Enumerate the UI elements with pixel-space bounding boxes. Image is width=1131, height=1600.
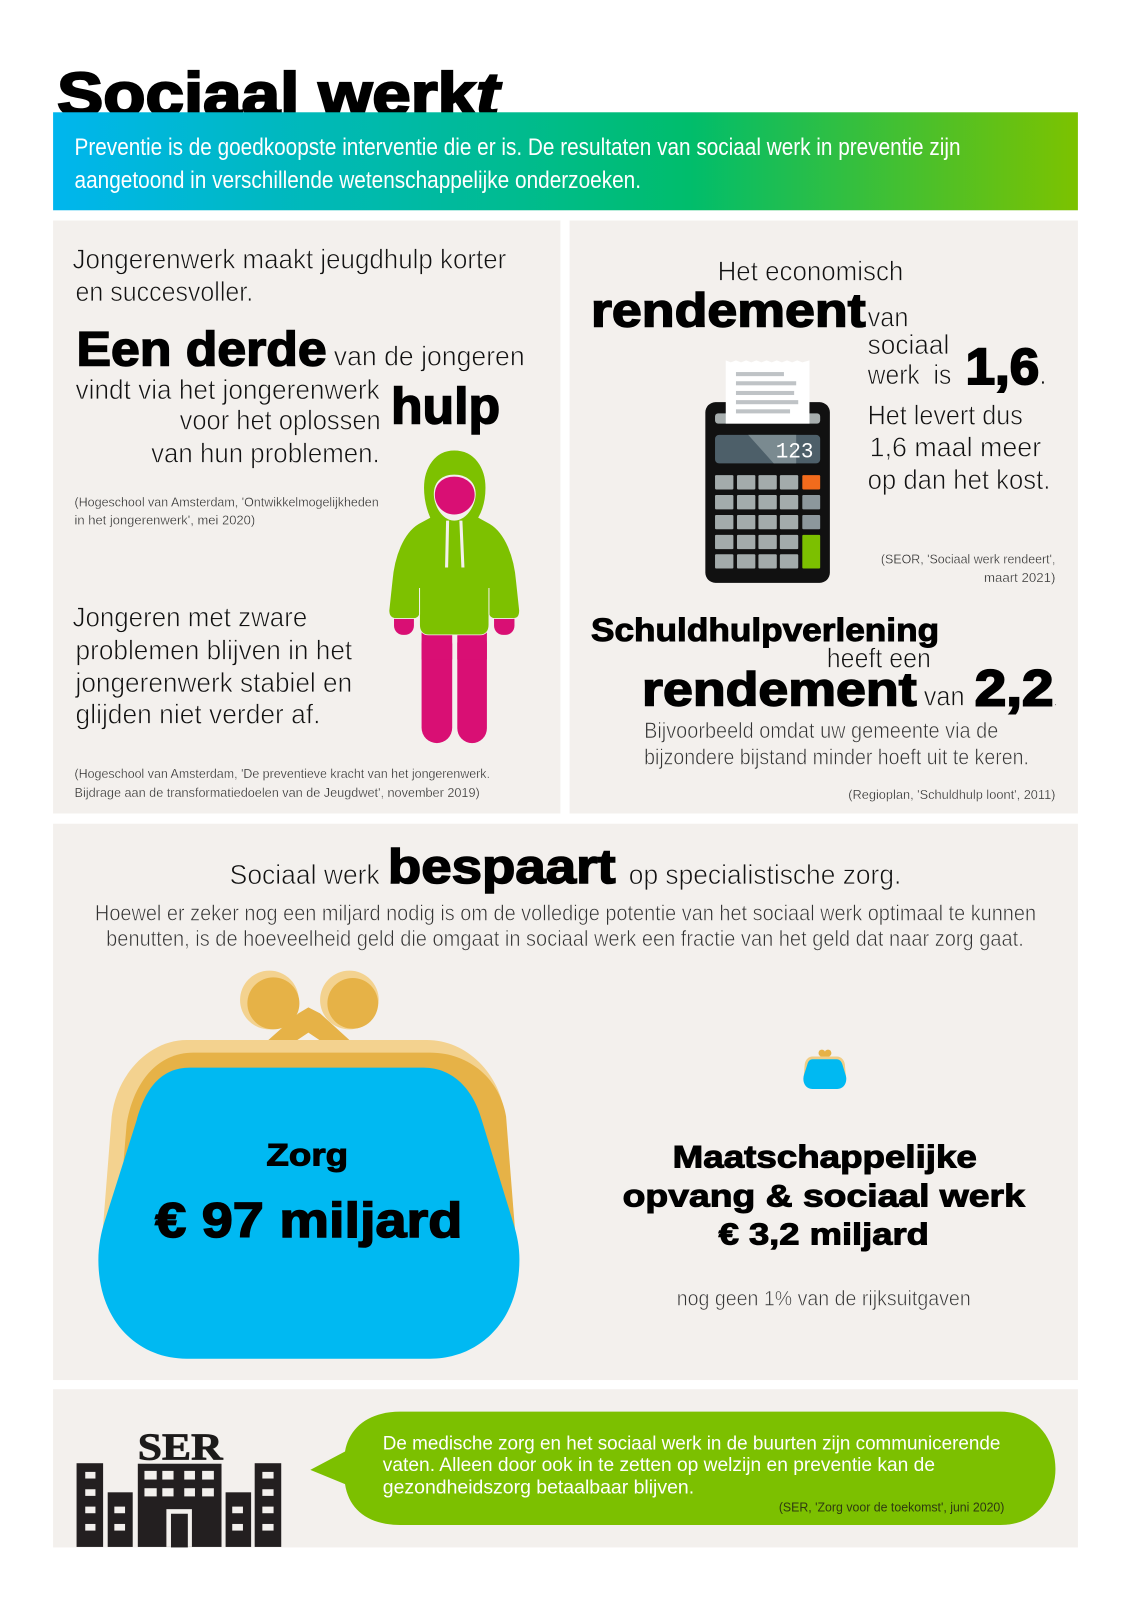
text block: een derde vindt hulp: Een derde (77, 323, 327, 376)
text block: schuldhulpverlening (591, 611, 1057, 770)
text block: jeugdhulp korter (72, 243, 506, 307)
title: Sociaal werk t (57, 60, 502, 128)
source: Hogeschool van Amsterdam 2019: (Hogeschool van Amsterdam, 'De preventieve kracht van het jongerenwerk. (75, 766, 490, 781)
text block: jeugdhulp korter: Jongerenwerk maakt jeugdhulp korter (72, 243, 506, 274)
text block: economisch rendement: . (1039, 359, 1047, 390)
label: Zorg amount (155, 1137, 462, 1248)
text block: een derde vindt hulp: voor het oplossen (180, 405, 381, 436)
panel: jongerenwerk (53, 220, 560, 814)
text block: zware problemen: jongerenwerk stabiel en (75, 667, 352, 698)
intro banner: aangetoond in verschillende wetenschappelijke onderzoeken. (75, 167, 641, 194)
text block: economisch rendement (591, 256, 1050, 495)
text block: een derde vindt hulp: van hun problemen. (151, 437, 380, 468)
text block: schuldhulpverlening: bijzondere bijstand minder hoeft uit te keren. (644, 745, 1029, 770)
text block: schuldhulpverlening: . (1053, 693, 1057, 709)
source: Hogeschool van Amsterdam 2019: Bijdrage aan de transformatiedoelen van de Jeugdwet', november 2019) (75, 785, 480, 800)
callout: speech bubble: (SER, 'Zorg voor de toekomst', juni 2020) (779, 1500, 1004, 1515)
text block: een derde vindt hulp: van de jongeren (334, 340, 525, 371)
intro banner (53, 112, 1078, 210)
text block: economisch rendement: Het economisch (718, 256, 903, 287)
text block: economisch rendement: sociaal (868, 329, 949, 360)
text block: schuldhulpverlening: rendement (642, 662, 917, 715)
source: SEOR: (SEOR, 'Sociaal werk rendeert', (881, 551, 1055, 566)
source: SEOR (881, 551, 1055, 585)
label: Zorg amount: Zorg (266, 1137, 348, 1173)
text block: economisch rendement: 1,6 maal meer (870, 431, 1041, 462)
heading: bespaart: bespaart (388, 841, 616, 894)
callout: speech bubble: De medische zorg en het sociaal werk in de buurten zijn communicerende (383, 1432, 1000, 1454)
icon: young person in hoodie (389, 450, 520, 743)
text block: jeugdhulp korter: en succesvoller. (76, 276, 253, 307)
icon: SER building (77, 1427, 281, 1547)
text block: een derde vindt hulp: hulp (391, 378, 500, 435)
heading: bespaart: Sociaal werk (230, 859, 380, 890)
panel: SER quote (53, 1389, 1078, 1547)
source: Regioplan: (Regioplan, 'Schuldhulp loont', 2011) (848, 787, 1055, 802)
icon: SER building: SER (138, 1427, 223, 1469)
text block: een derde vindt hulp: vindt via het jongerenwerk (76, 374, 380, 405)
label: maatschappelijke opvang amount: € 3,2 miljard (719, 1217, 929, 1251)
callout: speech bubble: vaten. Alleen door ook in te zetten op welzijn en preventie kan de (383, 1454, 935, 1476)
text block: economisch rendement: Het levert dus (868, 400, 1023, 431)
source: Hogeschool van Amsterdam 2020 (75, 494, 379, 528)
icon: calculator (705, 360, 830, 583)
panel: rendement (570, 220, 1078, 814)
text block: zware problemen: problemen blijven in het (76, 634, 352, 665)
note: rijksuitgaven: nog geen 1% van de rijksuitgaven (677, 1287, 971, 1311)
label: Zorg amount: € 97 miljard (155, 1194, 462, 1248)
text block: een derde vindt hulp (76, 323, 525, 468)
icon: large purse (98, 971, 519, 1359)
text block: schuldhulpverlening: Schuldhulpverlening (591, 611, 939, 648)
source: SEOR: maart 2021) (984, 570, 1055, 585)
text block: schuldhulpverlening: Bijvoorbeeld omdat uw gemeente via de (644, 718, 998, 743)
text block: toelichting: benutten, is de hoeveelheid geld die omgaat in sociaal werk een fractie van het geld dat naar zorg gaat. (106, 926, 1024, 951)
text block: schuldhulpverlening: heeft een (827, 643, 931, 674)
source: Hogeschool van Amsterdam 2020: in het jongerenwerk', mei 2020) (75, 513, 255, 528)
icon: calculator: 123 (776, 438, 814, 464)
icon: small purse (803, 1050, 846, 1089)
heading: bespaart (230, 841, 901, 894)
text block: zware problemen: glijden niet verder af. (76, 699, 321, 730)
text block: toelichting: Hoewel er zeker nog een miljard nodig is om de volledige potentie van het sociaal werk optimaal te kunnen (95, 901, 1036, 926)
intro banner: Preventie is de goedkoopste interventie die er is. De resultaten van sociaal werk in preventie zijn (75, 134, 961, 161)
source: Hogeschool van Amsterdam 2019 (75, 766, 490, 800)
text block: toelichting (95, 901, 1036, 951)
text block: economisch rendement: rendement (591, 284, 866, 337)
source: Hogeschool van Amsterdam 2020: (Hogeschool van Amsterdam, 'Ontwikkelmogelijkheden (75, 494, 379, 509)
text block: economisch rendement: op dan het kost. (868, 464, 1050, 495)
panel: bespaart (53, 824, 1078, 1380)
callout: speech bubble: gezondheidszorg betaalbaar blijven. (383, 1476, 694, 1498)
text block: schuldhulpverlening: 2,2 (975, 659, 1053, 716)
text block: zware problemen: Jongeren met zware (72, 602, 307, 633)
text block: schuldhulpverlening: van (924, 680, 965, 711)
label: maatschappelijke opvang amount: opvang & sociaal werk (623, 1178, 1025, 1214)
text block: economisch rendement: 1,6 (966, 338, 1039, 395)
text block: economisch rendement: werk is (867, 359, 951, 390)
text block: zware problemen (72, 602, 352, 730)
callout: speech bubble (310, 1412, 1055, 1525)
heading: bespaart: op specialistische zorg. (629, 859, 901, 890)
text block: economisch rendement: van (868, 302, 908, 333)
label: maatschappelijke opvang amount (623, 1139, 1025, 1311)
label: maatschappelijke opvang amount: Maatschappelijke (673, 1139, 977, 1175)
